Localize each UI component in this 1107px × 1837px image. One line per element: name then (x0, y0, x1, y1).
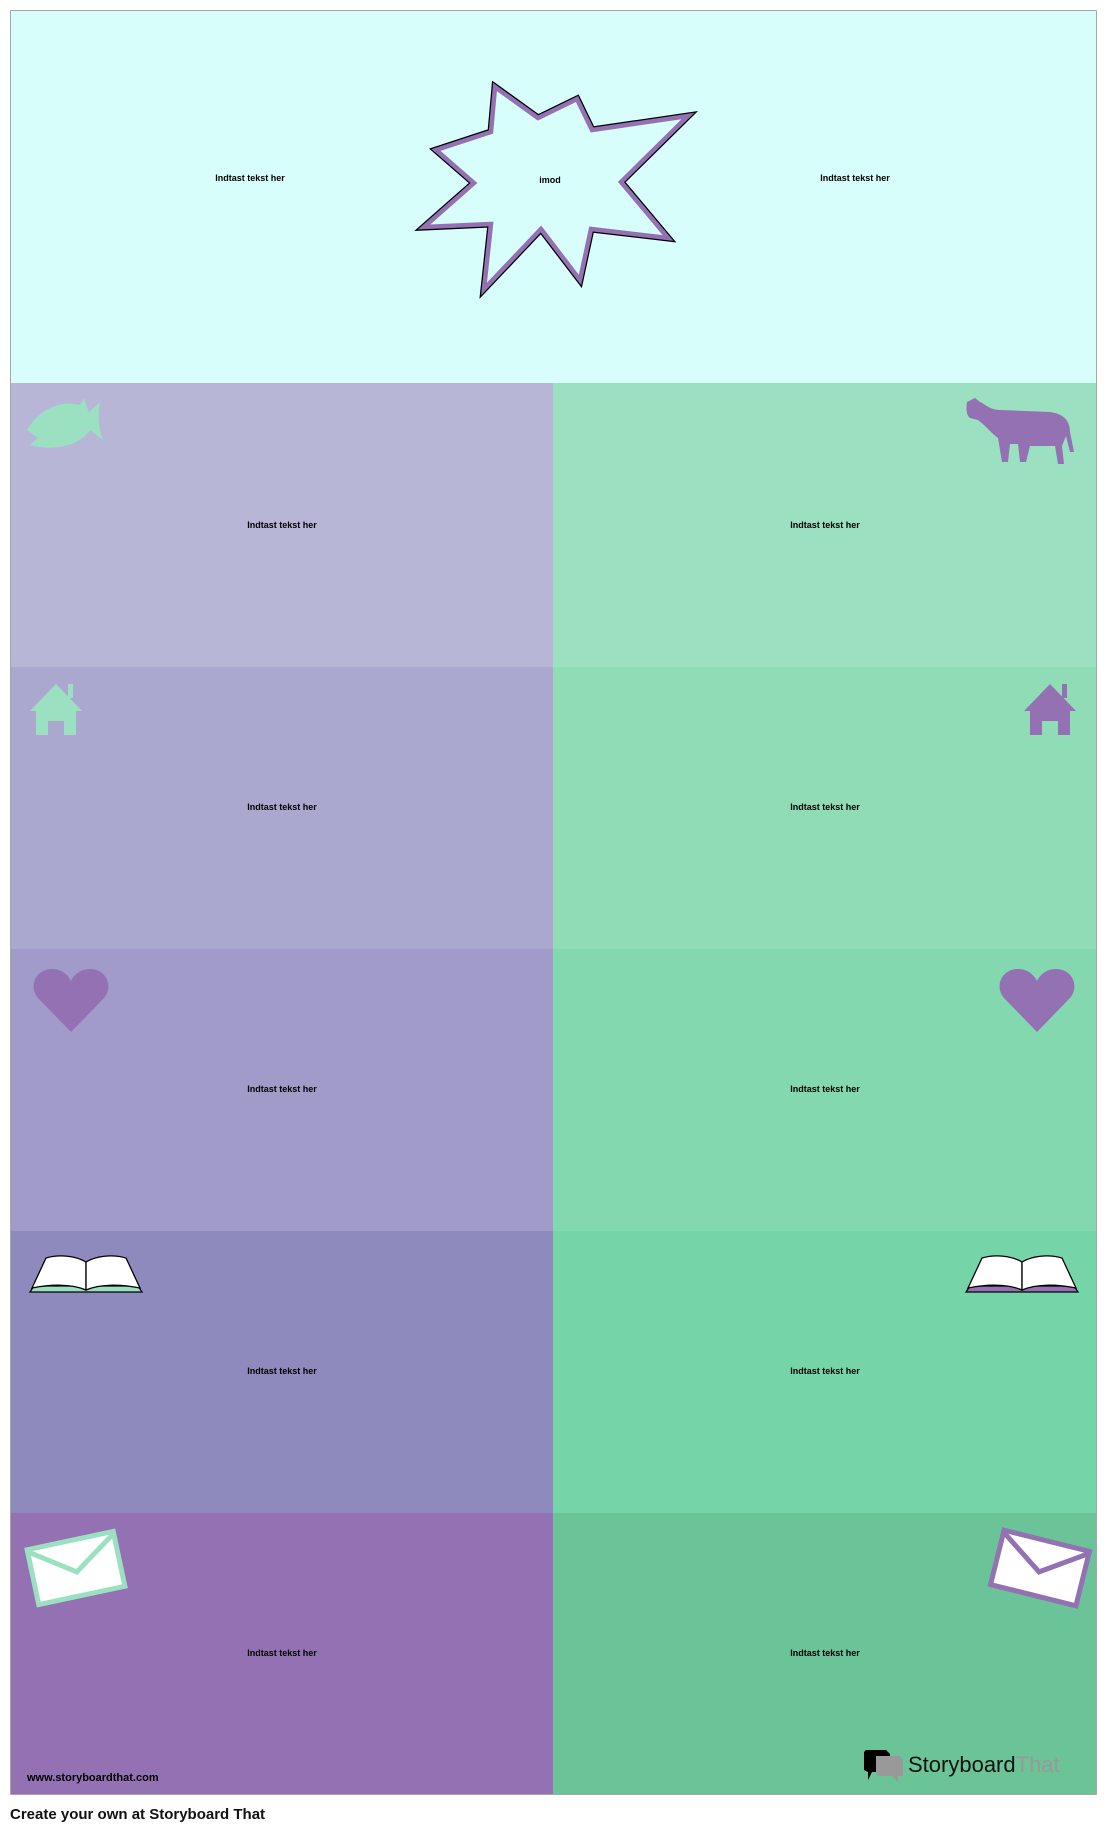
icon: cow (966, 398, 1074, 464)
star burst "imod": imod (539, 175, 561, 185)
icon: heart left (34, 969, 108, 1032)
footer url: www.storyboardthat.com (26, 1772, 159, 1784)
panel texts: Indtast tekst her (247, 1084, 317, 1094)
caption: Create your own at Storyboard That (10, 1806, 265, 1823)
panel texts: Indtast tekst her (790, 1366, 860, 1376)
panel texts: Indtast tekst her (790, 1648, 860, 1658)
icon: envelope left (27, 1531, 125, 1605)
logo: Storyboard That: StoryboardThat (908, 1752, 1060, 1777)
right column panels (553, 383, 1096, 1794)
icon: book right (966, 1256, 1078, 1292)
icon: fish (27, 398, 103, 448)
logo: Storyboard That (864, 1750, 1060, 1782)
text: left topic: Indtast tekst her (215, 173, 285, 183)
icon: house left (30, 684, 82, 735)
panel texts: Indtast tekst her (790, 1084, 860, 1094)
panel texts: Indtast tekst her (790, 802, 860, 812)
icon: heart right (1000, 969, 1074, 1032)
icon: book left (30, 1256, 142, 1292)
star burst "imod" (424, 87, 688, 289)
icon: envelope right (991, 1530, 1089, 1606)
panel texts (247, 520, 860, 1658)
panel texts: Indtast tekst her (790, 520, 860, 530)
left column panels (11, 383, 553, 1794)
top panel: comparison header (11, 11, 1096, 383)
text: right topic: Indtast tekst her (820, 173, 890, 183)
panel texts: Indtast tekst her (247, 1648, 317, 1658)
panel texts: Indtast tekst her (247, 1366, 317, 1376)
icon: house right (1024, 684, 1076, 735)
panel texts: Indtast tekst her (247, 802, 317, 812)
panel texts: Indtast tekst her (247, 520, 317, 530)
